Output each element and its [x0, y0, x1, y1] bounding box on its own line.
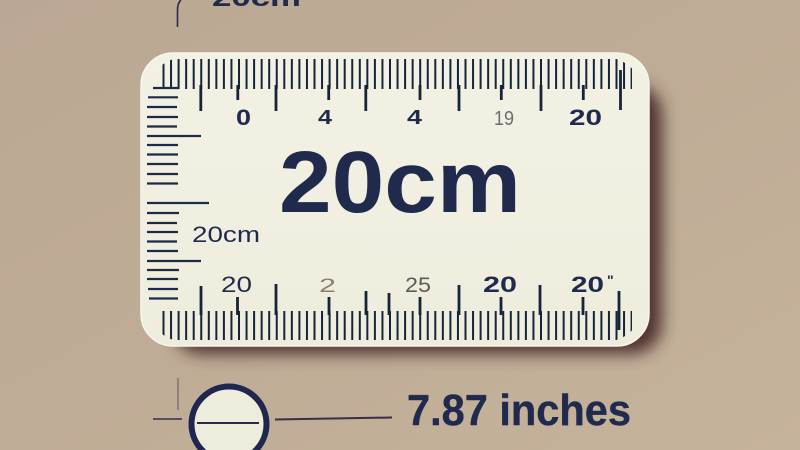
- top tick marks: [162, 70, 632, 111]
- bottom scale numbers: [221, 272, 614, 297]
- top scale numbers: 4: [407, 107, 423, 129]
- bottom dimension lines: [153, 378, 392, 420]
- side label: 20cm: [192, 222, 260, 247]
- top scale numbers: 19: [494, 108, 514, 130]
- bottom scale numbers: ": [607, 272, 614, 288]
- bottom scale numbers: 25: [405, 274, 431, 297]
- main value: 20cm: [279, 134, 521, 231]
- top scale numbers: 4: [318, 107, 333, 129]
- top scale numbers: 20: [569, 105, 602, 130]
- left tick marks: [147, 88, 209, 298]
- ruler shadow: [172, 84, 662, 354]
- bottom scale numbers: 20: [483, 272, 517, 297]
- bottom scale numbers: 2: [319, 276, 336, 297]
- panel: ruler: [141, 53, 649, 346]
- inches label: 7.87 inches: [407, 386, 631, 435]
- top scale numbers: [236, 105, 602, 130]
- icon: circle gauge: [192, 386, 266, 450]
- bottom scale numbers: 20: [221, 272, 252, 297]
- ruler body: [141, 53, 649, 346]
- bottom scale numbers: 20: [571, 272, 604, 297]
- infographic: 20cm ruler: [140, 0, 674, 450]
- top scale numbers: 0: [236, 105, 251, 130]
- top clipped label with bracket: [178, 0, 301, 27]
- bottom tick marks: [162, 284, 632, 330]
